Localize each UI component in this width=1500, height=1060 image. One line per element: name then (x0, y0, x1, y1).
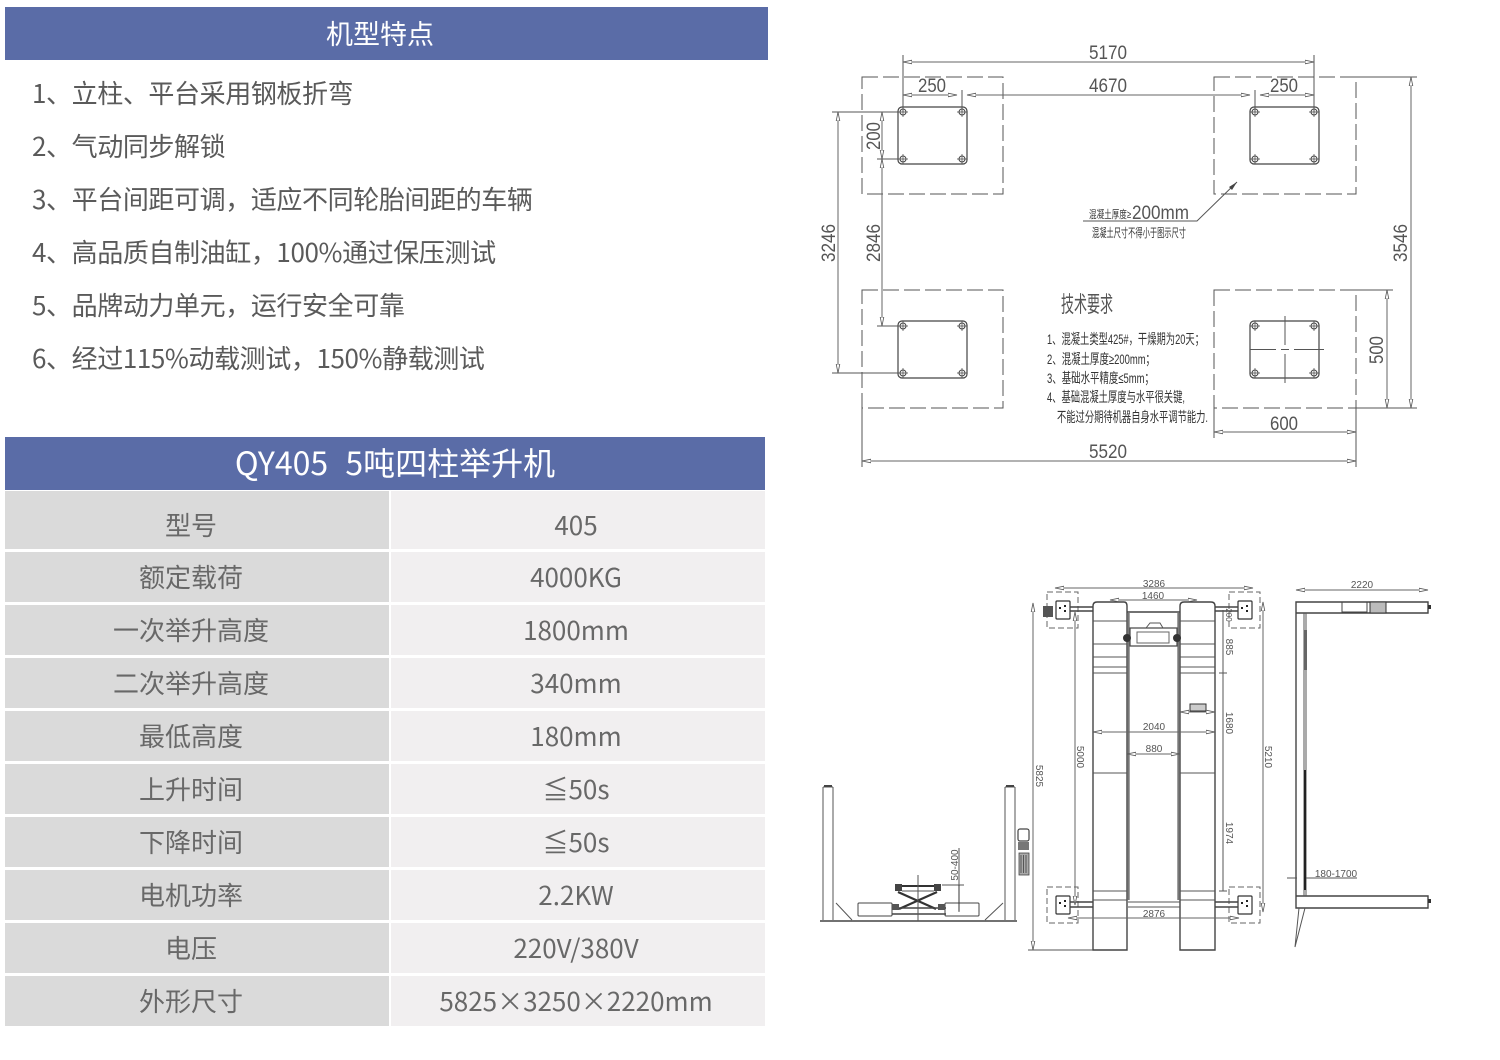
heading: specification table title: QY405 5吨四柱举升机 (235, 439, 555, 485)
diagram: side elevation (1287, 580, 1431, 947)
text block: technical requirements: 技术要求 (1061, 292, 1113, 317)
dimension labels: 885 (1223, 639, 1234, 656)
dimension labels: 200 (864, 122, 885, 150)
dimension labels: 2220 (1351, 580, 1374, 591)
dimension labels: 3246 (819, 224, 840, 262)
table: specifications: 上升时间 (139, 770, 243, 807)
dimension labels: 2040 (1143, 722, 1166, 733)
dimension labels: 600 (1270, 414, 1298, 435)
table: specifications: 一次举升高度 (113, 611, 269, 648)
dimension labels: 2876 (1143, 909, 1166, 920)
dimension labels: 1974 (1223, 822, 1234, 845)
table: specifications: 最低高度 (139, 717, 243, 754)
table: specifications: 5825×3250×2220mm (439, 982, 713, 1019)
table: specifications: 电压 (165, 929, 217, 966)
dimension labels (1033, 579, 1273, 920)
table: specifications: 405 (554, 506, 598, 543)
table: specifications: 1800mm (523, 611, 629, 648)
dimension: lift height: 50-400 (950, 849, 961, 881)
dimension lines (832, 55, 1417, 467)
table: specifications: ≦50s (542, 770, 610, 807)
table: specifications: 下降时间 (139, 823, 243, 860)
dimension labels: 250 (1270, 76, 1298, 97)
dimension labels: 3286 (1143, 579, 1166, 590)
heading: features: 机型特点 (326, 13, 434, 52)
text block: technical requirements: 4、基础混凝土厚度与水平很关键, (1047, 389, 1185, 405)
table: specifications: 4000KG (530, 558, 622, 595)
callout: concrete thickness (1083, 182, 1237, 240)
table: specifications: ≦50s (542, 823, 610, 860)
heading: features (5, 7, 768, 60)
dimension labels: 5000 (1074, 746, 1085, 769)
text block: features list: 6、经过115%动载测试，150%静载测试 (32, 339, 485, 376)
diagram: top plan of lift (1028, 579, 1273, 950)
dimension: lift height (942, 848, 964, 912)
callout: concrete thickness: 混凝土尺寸不得小于图示尺寸 (1092, 225, 1186, 240)
text block: features list: 2、气动同步解锁 (32, 127, 225, 164)
dimension labels: 5825 (1033, 765, 1044, 788)
dimension labels: 3546 (1391, 224, 1412, 262)
dimension labels: 1460 (1142, 591, 1165, 602)
dimension labels: 500 (1367, 336, 1388, 364)
table: specifications: 电机功率 (139, 876, 243, 913)
table: specifications: 180mm (530, 717, 622, 754)
text block: technical requirements (1047, 292, 1208, 425)
text block: technical requirements: 2、混凝土厚度≥200mm； (1047, 351, 1155, 368)
dimension labels: 5210 (1262, 746, 1273, 769)
text block: features list: 1、立柱、平台采用钢板折弯 (32, 74, 353, 111)
text block: features list: 3、平台间距可调，适应不同轮胎间距的车辆 (32, 180, 532, 217)
dimension labels: 180-1700 (1315, 869, 1358, 880)
table: specifications: 外形尺寸 (139, 982, 243, 1019)
foundation dashed squares (862, 77, 1356, 408)
text block: features list (32, 74, 532, 376)
posts (820, 785, 1017, 921)
text block: features list: 5、品牌动力单元，运行安全可靠 (32, 286, 404, 323)
dimension labels: 5170 (1089, 43, 1127, 64)
dimension labels (819, 43, 1412, 463)
diagram: foundation plan (819, 43, 1417, 467)
text block: technical requirements: 不能过分期待机器自身水平调节能力. (1057, 409, 1208, 425)
text block: features list: 4、高品质自制油缸，100%通过保压测试 (32, 233, 496, 270)
callout: concrete thickness: 混凝土厚度≥ (1089, 207, 1131, 221)
text block: technical requirements: 3、基础水平精度≤5mm； (1047, 370, 1154, 387)
crossbeam (1123, 623, 1206, 711)
dimension labels: 5520 (1089, 442, 1127, 463)
table: specifications: 二次举升高度 (113, 664, 269, 701)
dimension labels: 4670 (1089, 76, 1127, 97)
power unit (1018, 829, 1029, 875)
heading: specification table title (5, 437, 765, 490)
dimension labels: 2846 (864, 224, 885, 262)
base plates (898, 107, 1324, 383)
table: specifications: 2.2KW (538, 876, 614, 913)
dimension labels: 1680 (1223, 712, 1234, 735)
text block: technical requirements: 1、混凝土类型425#，干燥期为20天； (1047, 331, 1204, 348)
dimension lines (1028, 588, 1263, 950)
corner columns (1043, 592, 1260, 923)
table: specifications: 340mm (530, 664, 622, 701)
diagram: front elevation (820, 785, 1029, 921)
platforms (1093, 602, 1215, 950)
dimension labels: 250 (918, 76, 946, 97)
dimension labels: 200 (1224, 608, 1233, 622)
table: specifications: 额定载荷 (139, 558, 243, 595)
table: specifications: 220V/380V (513, 929, 639, 966)
callout: concrete thickness: 200mm (1132, 203, 1189, 224)
table: specifications: 型号 (165, 506, 217, 543)
table: specifications (5, 491, 765, 1026)
dimension labels: 880 (1146, 744, 1163, 755)
platforms and scissor lift (858, 875, 979, 921)
dimension labels (1287, 580, 1428, 880)
frame (1295, 602, 1431, 947)
